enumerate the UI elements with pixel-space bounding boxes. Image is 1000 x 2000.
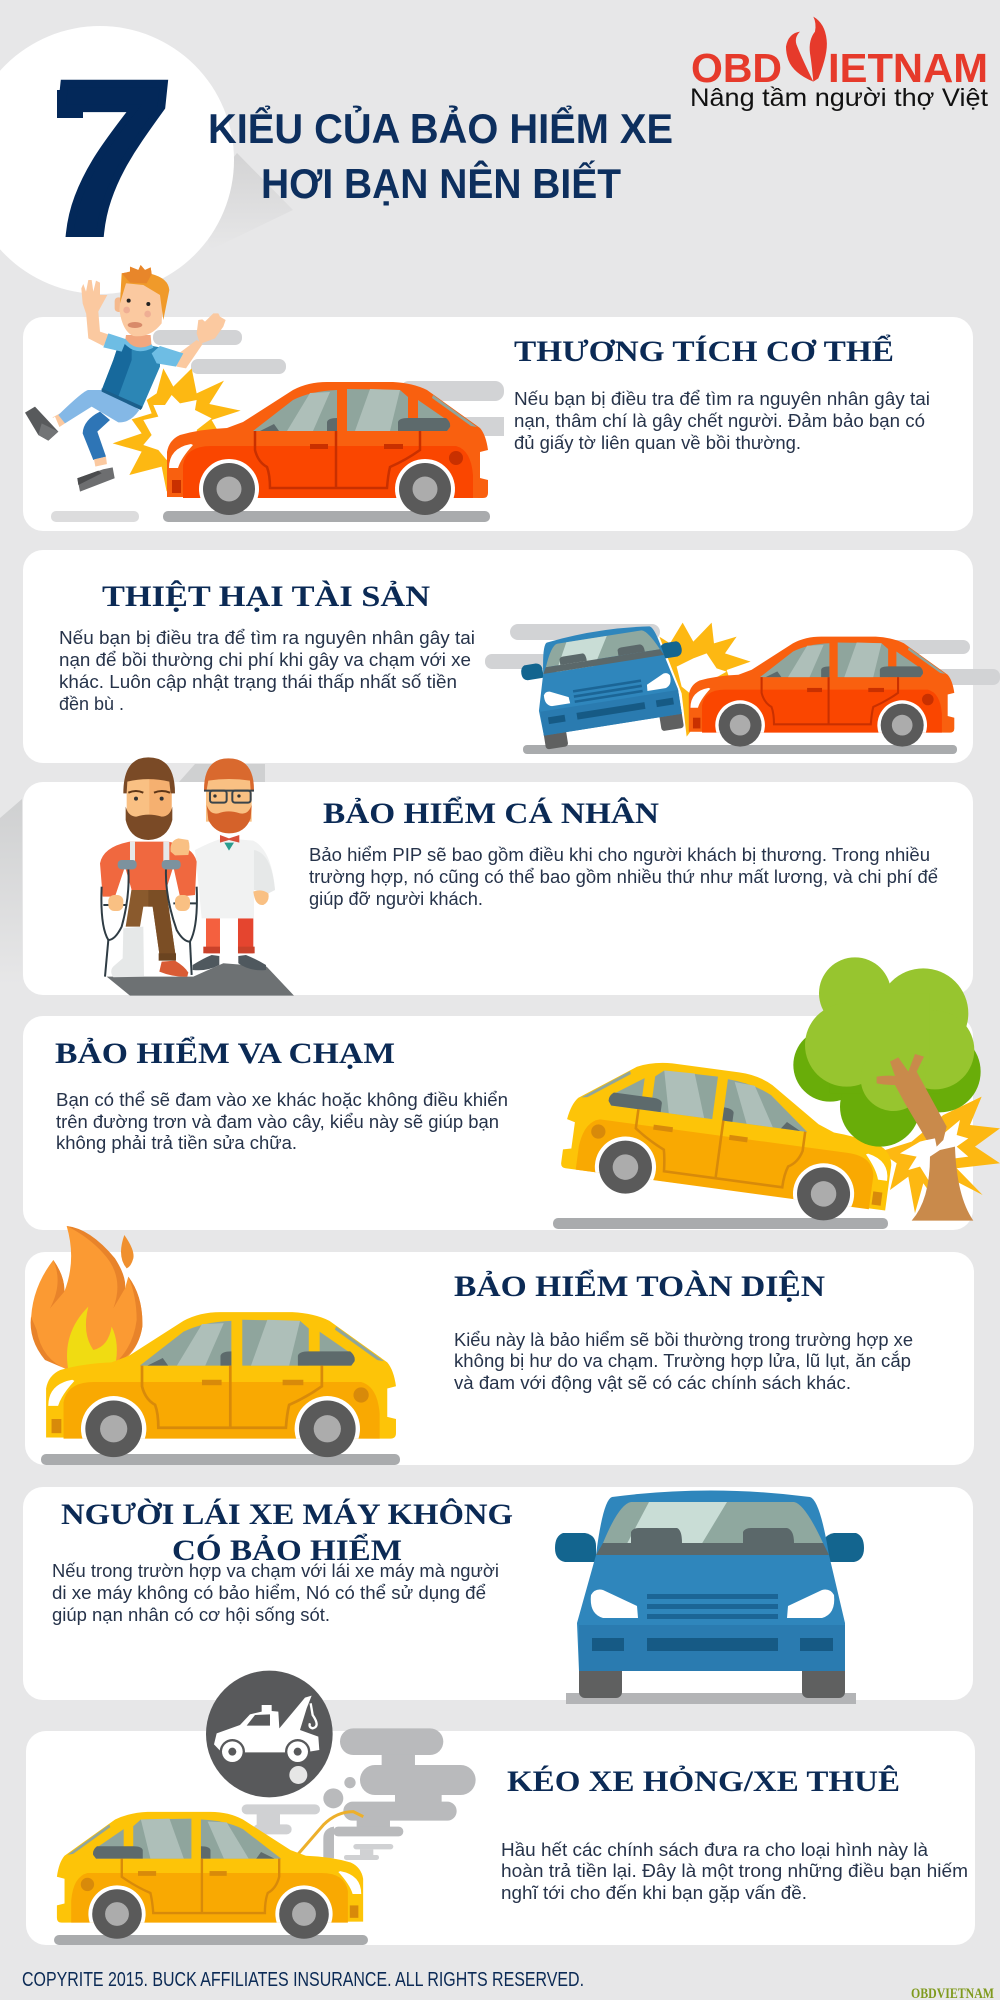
body text: Bạn có thể sẽ đam vào xe khác hoặc không điều khiển — [56, 1090, 508, 1110]
body text: di xe máy không có bảo hiểm, Nó có thể sử dụng để — [52, 1583, 486, 1603]
panel: kéo xe hỏng / xe thuê — [26, 1671, 975, 1945]
number 7: 7 — [35, 38, 178, 280]
car: blue front view — [555, 1490, 864, 1698]
body text: Kiểu này là bảo hiểm sẽ bồi thường trong trường hợp xe — [454, 1330, 913, 1350]
car: orange sedan — [167, 382, 488, 515]
body text — [59, 628, 475, 714]
title: KIỂU CỦA BẢO HIỂM XE — [208, 104, 673, 152]
body text: hoàn trả tiền lại. Đây là một trong những điều bạn hiếm — [501, 1861, 968, 1881]
body text: Nếu trong trườn hợp va chạm với lái xe máy mà người — [52, 1561, 499, 1581]
body text: và đam với động vật sẽ có các chính sách khác. — [454, 1373, 851, 1393]
logo wordmark: IETNAM — [828, 45, 988, 91]
white circle behind number — [0, 26, 234, 294]
floor — [107, 963, 294, 996]
heading — [61, 1498, 513, 1567]
body text: nạn, thâm chí là gây chết người. Đảm bảo bạn có — [514, 411, 925, 431]
body text — [514, 389, 930, 453]
panel: người lái xe máy không có bảo hiểm — [23, 1487, 973, 1704]
body text: Nếu bạn bị điều tra để tìm ra nguyên nhân gây tai — [514, 389, 930, 409]
smoke — [323, 1728, 476, 1858]
icon: tree — [793, 957, 981, 1221]
icon: smoke, tow badge and open hood — [206, 1671, 476, 1860]
panel: bảo hiểm toàn diện — [25, 1226, 974, 1465]
heading: BẢO HIỂM VA CHẠM — [55, 1037, 395, 1070]
heading: THƯƠNG TÍCH CƠ THỂ — [514, 335, 894, 368]
heading: CÓ BẢO HIỂM — [172, 1534, 402, 1567]
logo flame — [786, 17, 827, 82]
body text — [501, 1840, 968, 1903]
body text: đủ giấy tờ liên quan về bồi thường. — [514, 433, 801, 453]
body text: giúp nạn nhân có cơ hội sống sót. — [52, 1605, 330, 1625]
heading: BẢO HIỂM TOÀN DIỆN — [454, 1270, 825, 1303]
body text: đền bù . — [59, 694, 124, 714]
arms — [86, 312, 110, 346]
road — [54, 1935, 368, 1945]
road — [566, 1693, 856, 1704]
front leg — [53, 413, 65, 428]
car: yellow sedan hood open — [57, 1812, 363, 1939]
back leg — [83, 412, 110, 460]
illustration: two men — [100, 757, 294, 996]
icon: impact star — [659, 623, 751, 737]
open hood — [297, 1812, 363, 1855]
body text: giúp đỡ người khách. — [309, 889, 483, 909]
body text: trên đường trơn và đam vào cây, kiểu này sẽ giúp bạn — [56, 1112, 499, 1132]
panel: thương tích cơ thể — [23, 265, 973, 531]
body text: Hầu hết các chính sách đưa ra cho loại hình này là — [501, 1840, 929, 1860]
tow truck badge — [206, 1671, 333, 1797]
logo: OBD Vietnam — [690, 17, 988, 112]
body text: không bị hư do va chạm. Trường hợp lửa, lũ lụt, ăn cắp — [454, 1350, 911, 1371]
title — [208, 104, 673, 207]
footer copyright: COPYRITE 2015. BUCK AFFILIATES INSURANCE. ALL RIGHTS RESERVED. — [22, 1969, 584, 1991]
motion clouds — [485, 624, 1000, 685]
logo wordmark — [691, 45, 988, 91]
heading: THIỆT HẠI TÀI SẢN — [102, 580, 430, 613]
icon: man hit by car with impact star — [25, 265, 241, 492]
road — [523, 745, 957, 754]
car: blue front view tilted — [517, 619, 694, 752]
body text — [309, 845, 938, 909]
heading: KÉO XE HỎNG/XE THUÊ — [507, 1765, 900, 1798]
body text — [56, 1090, 508, 1153]
car: yellow sedan — [46, 1312, 396, 1457]
body text: Nếu bạn bị điều tra để tìm ra nguyên nhân gây tai — [59, 628, 475, 648]
head — [115, 297, 123, 312]
impact star — [113, 368, 241, 492]
body text: không phải trả tiền sửa chữa. — [56, 1133, 297, 1153]
icon: impact star behind tree — [880, 1097, 1000, 1217]
road — [553, 1218, 888, 1229]
heading: BẢO HIỂM CÁ NHÂN — [323, 797, 659, 830]
car: yellow sedan crashing — [558, 1050, 901, 1229]
body text — [52, 1561, 499, 1625]
logo wordmark: OBD — [691, 45, 782, 91]
panel: bảo hiểm cá nhân — [23, 757, 973, 996]
small road mark — [51, 511, 139, 522]
body text: nghĩ tới cho đến khi bạn gặp vấn đề. — [501, 1883, 807, 1903]
body text: nạn để bồi thường chi phí khi gây va chạm với xe — [59, 650, 471, 670]
body text — [454, 1330, 913, 1393]
title: HƠI BẠN NÊN BIẾT — [261, 159, 621, 207]
car: orange sedan — [689, 637, 954, 747]
body text: trường hợp, nó cũng có thể bao gồm nhiều thứ như mất lương, và chi phí để — [309, 867, 938, 887]
logo tagline: Nâng tầm người thợ Việt — [690, 84, 988, 112]
heading: NGƯỜI LÁI XE MÁY KHÔNG — [61, 1498, 513, 1531]
torso — [102, 340, 160, 409]
panel: thiệt hại tài sản — [23, 550, 1000, 763]
body text: khác. Luôn cập nhật trạng thái thấp nhất số tiền — [59, 672, 457, 692]
motion clouds — [153, 330, 504, 436]
panel: bảo hiểm va chạm — [23, 957, 1000, 1230]
road — [163, 511, 490, 522]
body text: Bảo hiểm PIP sẽ bao gồm điều khi cho người khách bị thương. Trong nhiều — [309, 845, 930, 865]
background chevron shadows — [0, 153, 293, 985]
doctor — [193, 758, 275, 970]
icon: fire — [31, 1226, 142, 1370]
man on crutches — [100, 757, 197, 977]
road — [41, 1454, 400, 1465]
light smoke — [242, 1804, 393, 1860]
